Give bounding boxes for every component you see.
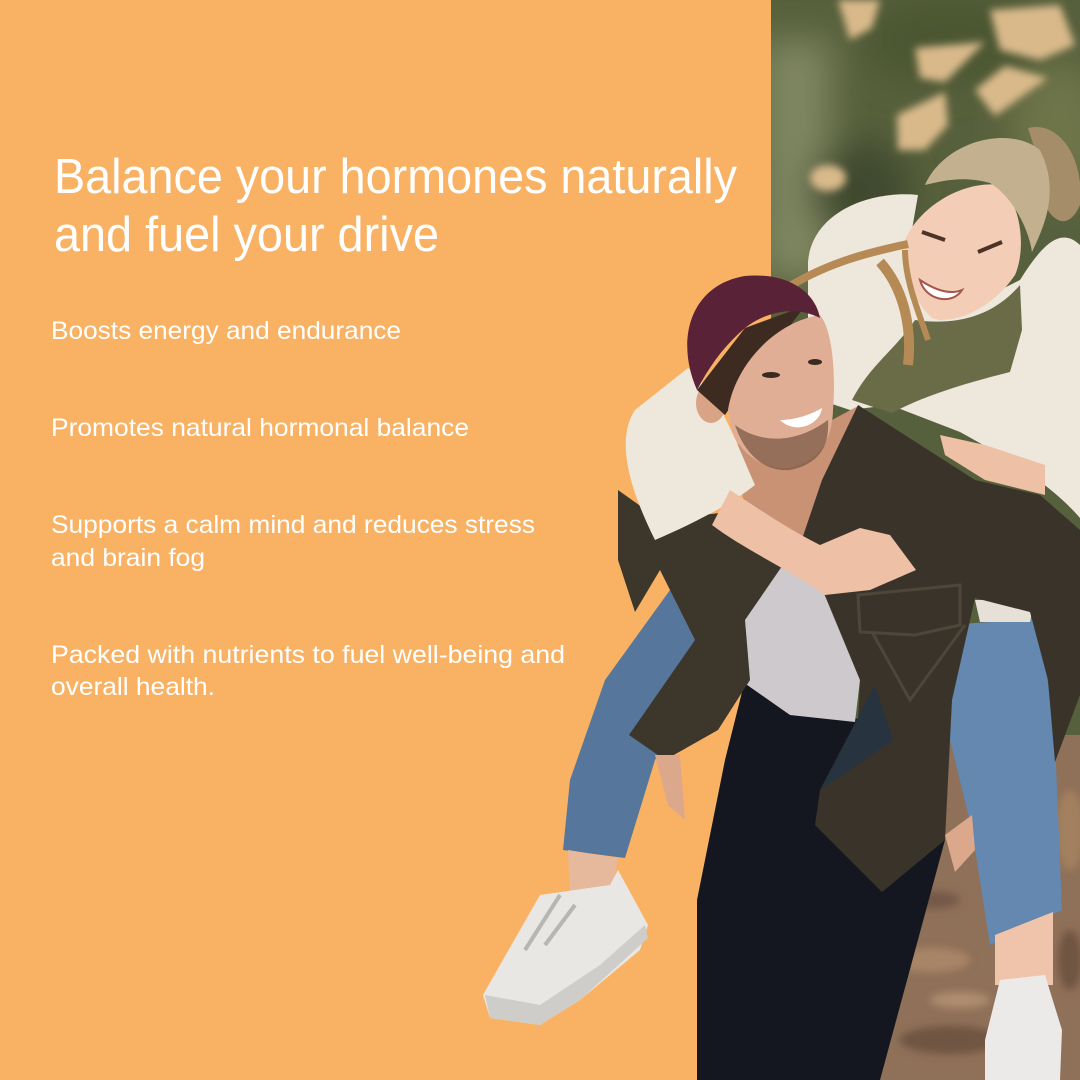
woman's ponytail <box>1028 127 1080 221</box>
man's hair <box>697 306 805 415</box>
benefit: nutrients <box>51 641 565 701</box>
man's dark jacket left side <box>618 490 800 760</box>
man's stubble <box>735 420 828 470</box>
photo: couple piggyback <box>483 127 1080 1080</box>
woman's hair strands <box>790 244 928 365</box>
man's t-shirt <box>740 545 860 722</box>
title <box>54 150 737 262</box>
cream jacket hem <box>975 600 1035 622</box>
woman's right jeans leg <box>950 618 1062 945</box>
benefit: calm mind <box>51 511 535 572</box>
benefit: calm mind: and brain fog <box>51 544 205 572</box>
woman's left white sneaker <box>483 870 648 1025</box>
benefit: hormonal balance: Promotes natural hormonal balance <box>51 414 469 442</box>
man's ear <box>696 383 726 423</box>
man's black trousers <box>697 680 945 1080</box>
jacket pocket <box>858 585 965 700</box>
photo background: autumn park <box>760 0 1080 1080</box>
benefit: nutrients: overall health. <box>51 673 215 701</box>
benefit: calm mind: Supports a calm mind and reduces stress <box>51 511 535 539</box>
man's smile <box>780 408 822 427</box>
title: and fuel your drive <box>54 208 439 262</box>
man's maroon beanie <box>687 275 820 390</box>
woman's hair <box>925 138 1050 252</box>
man's dark jacket right side <box>800 405 1080 892</box>
woman's right white sneaker <box>985 975 1062 1080</box>
jacket quilted lining <box>820 685 893 790</box>
man's neck <box>735 405 860 545</box>
woman's bare ankles <box>568 850 1053 985</box>
woman's face <box>904 184 1021 320</box>
woman's eyes and smile <box>920 232 1002 299</box>
title: Balance your hormones naturally <box>54 150 737 204</box>
woman's fleece sleeve <box>626 368 755 540</box>
man's eyes <box>762 359 822 378</box>
woman's left jeans leg <box>563 590 700 858</box>
woman's cream jacket <box>808 194 1080 518</box>
woman's arm and hand across chest <box>712 490 916 595</box>
benefit: nutrients: Packed with nutrients to fuel well-being and <box>51 641 565 669</box>
man's hands <box>655 755 975 872</box>
ground with fallen leaves <box>880 735 1080 1080</box>
man's face <box>728 315 834 468</box>
woman's right hand on shoulder <box>940 435 1045 495</box>
benefit: energy: Boosts energy and endurance <box>51 317 401 345</box>
woman's green sweater <box>852 285 1022 413</box>
